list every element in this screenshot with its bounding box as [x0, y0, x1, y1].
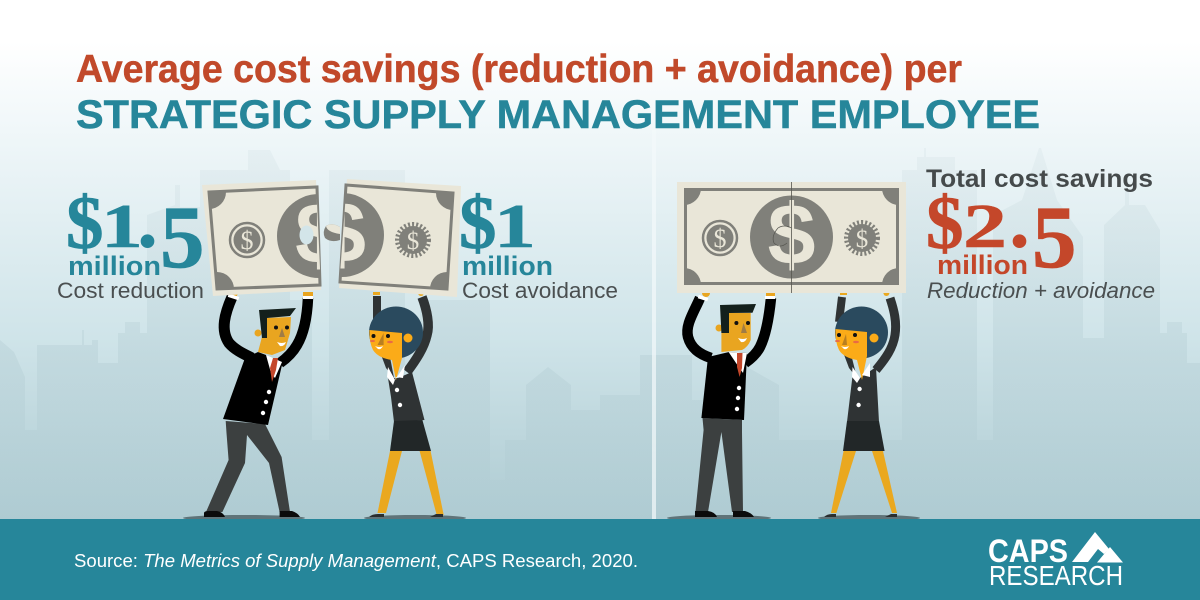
- stat: cost avoidance: [459, 182, 618, 303]
- woman 1: [369, 290, 444, 517]
- stat: total cost savings: million: [937, 250, 1028, 280]
- left bill half: $: [240, 226, 254, 255]
- stat: total cost savings: [926, 165, 1155, 303]
- light vertical divider: [652, 130, 656, 519]
- stat: total cost savings: .: [1009, 173, 1030, 266]
- man 1: [204, 289, 313, 517]
- footer band: [0, 519, 1200, 600]
- stat: total cost savings: Reduction + avoidance: [927, 278, 1155, 303]
- stat: total cost savings: 2: [963, 193, 1007, 261]
- stat: total cost savings: $: [926, 182, 964, 265]
- right bill half: $: [318, 185, 366, 281]
- stat: cost avoidance: Cost avoidance: [462, 278, 618, 303]
- ground shadows: [183, 515, 920, 521]
- stat: cost reduction: $: [66, 182, 104, 265]
- man 2: [687, 289, 775, 517]
- right bill half: [324, 179, 461, 297]
- source note: Source: The Metrics of Supply Management , CAPS Research, 2020.: [74, 551, 638, 571]
- stat: cost avoidance: million: [462, 251, 553, 281]
- left bill half: [202, 180, 322, 296]
- stat: cost reduction: 5: [160, 189, 204, 287]
- stat: cost reduction: Cost reduction: [57, 278, 204, 303]
- woman 2: [824, 290, 897, 517]
- stat: cost reduction: million: [68, 251, 161, 281]
- stat: cost avoidance: 1: [494, 191, 536, 260]
- title line 1: Average cost savings (reduction + avoidance) per: [76, 48, 962, 91]
- title line 2: STRATEGIC SUPPLY MANAGEMENT EMPLOYEE: [76, 93, 1040, 137]
- city skyline: [0, 148, 1200, 519]
- right bill half: $: [407, 228, 419, 255]
- CAPS Research logo: CAPS: [988, 533, 1068, 569]
- stat: cost reduction: 1: [101, 191, 143, 260]
- joined bill: [677, 182, 906, 293]
- stat: total cost savings: Total cost savings: [926, 165, 1153, 193]
- left bill half: $: [295, 186, 343, 282]
- stat: cost reduction: [57, 173, 204, 303]
- CAPS Research logo: RESEARCH: [989, 560, 1123, 591]
- joined bill: $: [856, 226, 868, 253]
- stat: total cost savings: 5: [1032, 189, 1076, 287]
- joined bill: $: [768, 187, 815, 283]
- CAPS Research logo: [988, 532, 1123, 591]
- stat: cost reduction: .: [137, 173, 158, 266]
- title: [76, 48, 1040, 137]
- stat: cost avoidance: $: [459, 182, 496, 265]
- joined bill: $: [714, 224, 726, 253]
